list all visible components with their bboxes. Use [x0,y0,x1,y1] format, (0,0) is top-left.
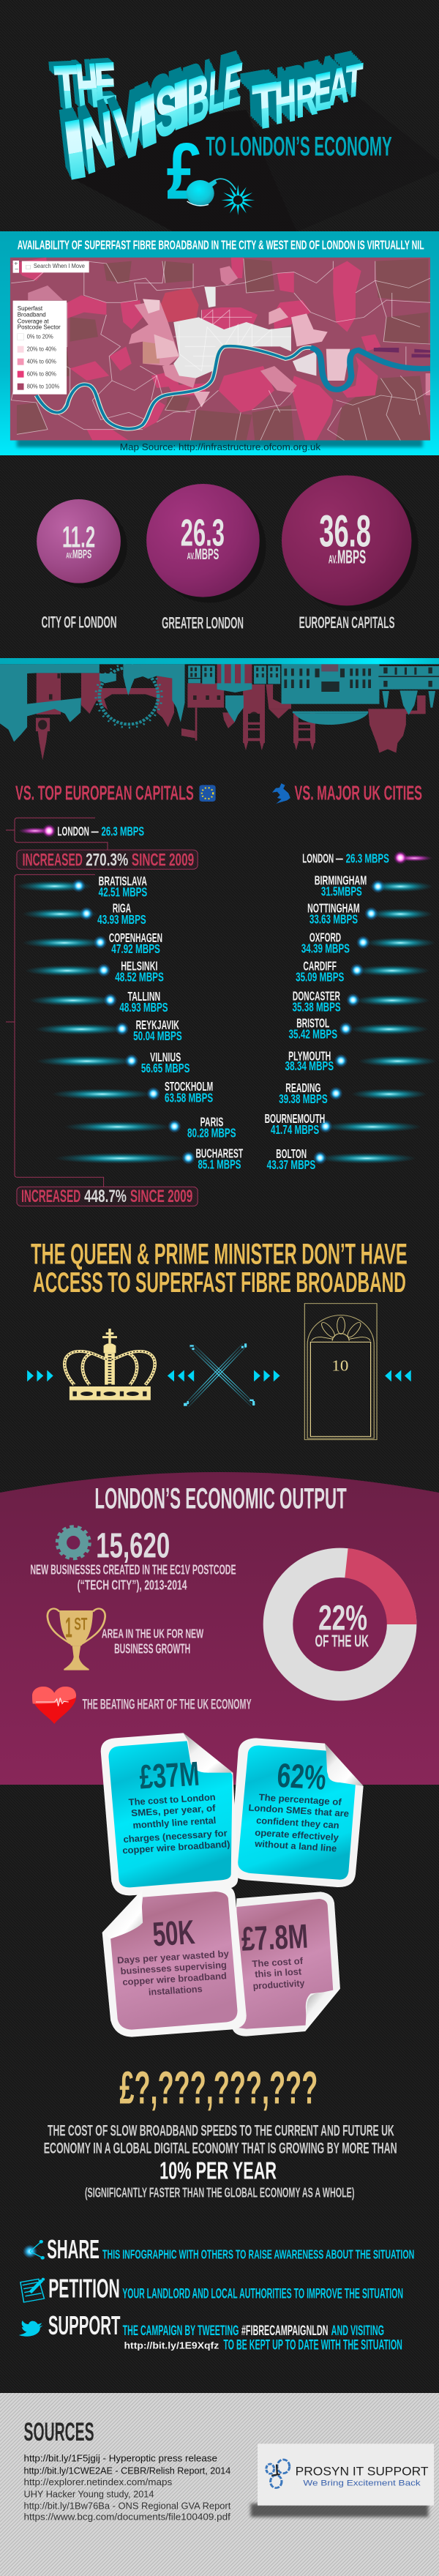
title word: THREAT [252,53,364,143]
row: Oxford: OXFORD [309,930,341,944]
sticker: £7.8M: The cost of [252,1956,304,1969]
sticker: £7.8M: productivity [252,1978,305,1991]
stickers and heart [32,1687,364,2037]
sticker: 62%: operate effectively [255,1827,339,1843]
title word: INVISIBLE [59,51,244,197]
donut chart: 22% of the UK: 22% [318,1599,367,1638]
panel content: economic output [30,1482,416,1700]
title word: THREAT: T [252,70,278,143]
map legend: 0% to 20% [27,333,53,340]
title word: INVISIBLE: S [154,70,179,153]
map legend: 40% to 60% [27,358,56,365]
sticker: £37M: The cost to London [128,1792,216,1807]
sticker: £37M: charges (necessary for [123,1828,228,1845]
source list: http://bit.ly/1CWE2AE - CEBR/Relish Report, 2014 [24,2465,230,2476]
title word: THREAT: A [329,57,349,117]
row: Birmingham: 31.5MBPS [321,884,362,898]
text: new businesses: (“TECH CITY”), 2013-2014 [78,1578,187,1593]
text: support description: http://bit.ly/1E9Xqfz [124,2340,219,2351]
sticker: £37M: £37M [138,1755,200,1796]
skyline top band [0,658,439,664]
sticker: £37M: monthly line rental [132,1815,217,1831]
logo: Prosyn IT Support [258,2444,434,2506]
callout: increased 448.7%: SINCE 2009 [130,1187,192,1206]
row: Helsinki [25,959,164,984]
row: Reading: READING [285,1080,321,1095]
cost section and call to action [44,2063,397,2200]
title word: THREAT: E [315,62,331,123]
sticker: £37M: SMEs, per year, of [131,1803,217,1818]
row: Reykjavik: REYKJAVIK [136,1018,179,1032]
circle: Greater London: 26.3 [181,511,225,553]
map legend [13,301,67,395]
actions: petition and support [19,2274,403,2353]
callout: increased 270.3% [17,850,198,870]
map legend: 80% to 100% [27,383,59,390]
London row left: LONDON — [57,824,99,839]
row: Reykjavik: 50.04 MBPS [133,1028,182,1043]
row: Helsinki: 48.52 MBPS [115,970,164,984]
circle labels [42,614,395,632]
title word: INVISIBLE: I [59,103,91,197]
text: new businesses: NEW BUSINESSES CREATED IN THE EC1V POSTCODE [30,1563,236,1578]
text: support description: THE CAMPAIGN BY TWEETING [123,2323,239,2339]
callout: increased 448.7%: 448.7% [84,1187,127,1206]
action: share [23,2235,414,2264]
row: Doncaster: DONCASTER [293,989,340,1003]
icon: UK map [272,783,290,804]
icons row: crown, cross, door [27,1304,411,1440]
row: Reading: 39.38 MBPS [279,1091,328,1106]
icon: crossed-out X [184,1343,255,1407]
donut chart: 22% of the UK [263,1548,416,1700]
map search control: + [14,260,18,266]
map legend: Postcode Sector [18,324,61,331]
actions: petition and support: SUPPORT [48,2311,121,2340]
heading: vs European capitals: VS. TOP EUROPEAN CAPITALS [15,783,194,804]
sticker: 50K: copper wire broadband [122,1971,227,1987]
map legend: 60% to 80% [27,370,56,377]
source list [24,2453,230,2523]
text: cost of slow broadband [44,2121,397,2157]
sticker: £37M [101,1733,238,1895]
row: Reykjavik [35,1018,182,1043]
title word: THE: T [53,53,81,124]
row: Bucharest [55,1146,243,1171]
sticker: £7.8M [233,1892,340,2036]
row: Bristol: 35.42 MBPS [289,1027,337,1041]
row: Nottingham: NOTTINGHAM [307,901,360,915]
panel: sources footer [0,2393,439,2576]
arrows: towards door [385,1370,411,1381]
row: Doncaster: 35.38 MBPS [292,1000,341,1014]
row: London right [302,851,432,866]
text: support description: #FIBRECAMPAIGNLDN [241,2323,328,2339]
row: Tallinn [29,989,168,1015]
row: Bratislava: BRATISLAVA [99,874,147,888]
row: Stockholm [52,1079,213,1105]
title word: THREAT: R [296,64,318,129]
row: Paris: 80.28 MBPS [187,1126,236,1140]
source list: https://www.bcg.com/documents/file100409.pdf [24,2512,230,2523]
London row left: 26.3 MBPS [102,824,144,839]
panel: London's economic output background [0,1472,439,1785]
icon: Number 10 door: 10 [331,1357,348,1374]
bracket: capitals to 448.7% [6,875,104,1187]
map search control [13,260,89,273]
row: Birmingham [315,873,432,898]
callout: increased 270.3%: INCREASED [23,851,83,870]
map search control: Search When I Move [34,263,85,269]
icon: EU flag [199,785,216,802]
row: Bolton: 43.37 MBPS [267,1157,315,1172]
circle: European capitals [282,475,419,611]
map of London broadband coverage [10,258,430,441]
arrows: towards crown [27,1370,194,1381]
title word: INVISIBLE: V [112,86,148,178]
row: Stockholm: 63.58 MBPS [165,1091,213,1105]
callout: increased 270.3%: SINCE 2009 [132,851,194,870]
row: Copenhagen: 47.92 MBPS [111,941,160,956]
sticker: 62%: 62% [276,1756,328,1797]
row: Paris [64,1115,236,1140]
icon: Number 10 door [304,1304,377,1440]
icon: petition [20,2278,45,2302]
row: Bristol: BRISTOL [296,1016,329,1030]
sticker: £7.8M: £7.8M [240,1917,309,1958]
row: Nottingham: 33.63 MBPS [309,912,358,926]
panel: map availability [0,231,439,455]
text: SOURCES [24,2417,94,2446]
icon: share [23,2240,45,2260]
London Eye [96,664,162,728]
title word: INVISIBLE: N [80,95,119,191]
comparison headings [15,783,435,1043]
comparison lower rows and heading [17,1049,437,1298]
logo: Prosyn IT Support: PROSYN IT SUPPORT [296,2465,428,2478]
circle: City of London [37,499,127,588]
row: Oxford [301,930,435,955]
title word: INVISIBLE: E [221,51,244,122]
row: Nottingham [307,901,432,926]
map legend: Coverage at [18,318,49,324]
sticker: 62% [230,1738,364,1887]
row: Bolton [267,1146,416,1172]
sticker: 62%: confident they can [256,1815,339,1831]
row: Vilnius: VILNIUS [150,1050,181,1064]
row: Vilnius [37,1050,190,1075]
source list: http://bit.ly/1F5jgij - Hyperoptic press release [24,2453,217,2464]
title word: THREAT: T [345,53,364,108]
circle: City of London: AV.MBPS [66,547,91,561]
header: title block [53,51,439,232]
source list: UHY Hacker Young study, 2014 [24,2489,154,2500]
circle labels: CITY OF LONDON [42,614,117,632]
row: Tallinn: TALLINN [127,989,160,1004]
row: Riga: RIGA [113,901,131,915]
heading: Queen and Prime Minister [31,1238,408,1298]
row: Oxford: 34.39 MBPS [301,941,350,955]
circle: Greater London [146,484,266,602]
text: support description: AND VISITING [331,2323,384,2339]
circle: Greater London: AV.MBPS [187,545,219,563]
row: Copenhagen [23,930,162,956]
icon: gear [58,1527,89,1558]
row: Doncaster [292,989,429,1014]
sticker: £7.8M: this in lost [255,1966,302,1979]
sticker: 62%: The percentage of [258,1792,342,1807]
row: Reading [279,1080,427,1106]
row: Vilnius: 56.65 MBPS [141,1061,190,1075]
sticker: 50K [102,1884,247,2037]
row: Bratislava: 42.51 MBPS [99,885,147,899]
icon: twitter bird [19,2321,43,2337]
text: first area: BUSINESS GROWTH [114,1642,190,1657]
title word: THE [53,51,118,124]
row: London right: LONDON — [302,851,343,866]
row: Cardiff [296,959,429,984]
sticker: £37M: copper wire broadband) [122,1839,230,1856]
source list: http://explorer.netindex.com/maps [24,2477,172,2488]
source list: http://bit.ly/1Bw76Ba - ONS Regional GVA Report [24,2501,230,2512]
row: London right: 26.3 MBPS [346,851,389,866]
arrows: towards cross [254,1370,280,1381]
circle: City of London: 11.2 [62,520,95,554]
row: Birmingham: BIRMINGHAM [315,873,367,887]
map search control: − [15,266,18,273]
title word: INVISIBLE: B [187,60,209,138]
sticker: 62%: without a land line [254,1838,337,1853]
action: share: SHARE [47,2235,100,2264]
row: Plymouth: 38.34 MBPS [285,1059,334,1073]
row: Bucharest: BUCHAREST [195,1146,243,1160]
row: Bratislava [17,874,147,899]
row: Tallinn: 48.93 MBPS [119,1000,168,1015]
title word: THE: E [93,51,118,116]
sticker: 62%: London SMEs that are [248,1802,350,1819]
row: Bournemouth [265,1111,421,1137]
icon: pound bomb [167,127,255,217]
circle: European capitals: 36.8 [319,506,371,556]
London row left [18,824,144,839]
speed comparison circles [0,475,439,760]
row: Bucharest: 85.1 MBPS [198,1157,241,1171]
text: first area: AREA IN THE UK FOR NEW [102,1627,204,1641]
callout: increased 448.7% [17,1187,198,1206]
title word: INVISIBLE: I [170,65,192,146]
row: Riga: 43.93 MBPS [97,912,146,927]
icon: crown [64,1329,155,1400]
row: Helsinki: HELSINKI [121,959,157,973]
icon: heart [32,1687,76,1724]
donut chart: 22% of the UK: OF THE UK [315,1632,369,1651]
icon: trophy: ST [74,1615,88,1634]
sticker: 50K: Days per year wasted by [117,1949,230,1965]
text: first area [102,1627,204,1657]
circle: European capitals: AV.MBPS [329,546,366,567]
sticker: 50K: businesses supervising [120,1960,227,1976]
skyline reflection [0,664,439,760]
sticker: 50K: installations [148,1984,203,1997]
logo: Prosyn IT Support: We Bring Excitement Back [303,2478,421,2487]
callout: increased 448.7%: INCREASED [21,1187,80,1206]
row: Paris: PARIS [200,1115,223,1129]
actions: petition and support: PETITION [48,2274,120,2304]
text: new businesses [30,1563,236,1593]
row: Stockholm: STOCKHOLM [165,1079,213,1094]
map source: Map Source: http://infrastructure.ofcom.org.uk [120,442,321,453]
row: Bournemouth: 41.74 MBPS [271,1122,319,1137]
circle labels: GREATER LONDON [162,615,244,632]
row: Plymouth [285,1049,437,1073]
map legend: Broadband [18,311,46,318]
row: Copenhagen: COPENHAGEN [109,930,162,945]
logo shadow [250,2504,428,2517]
row: Bolton: BOLTON [276,1146,307,1161]
icon: pound bomb: £ [167,127,203,217]
map shadow [17,438,423,447]
map legend: 20% to 40% [27,346,56,352]
map legend: Superfast [18,305,43,312]
title drop shadow [74,95,439,232]
icon: trophy [48,1609,105,1670]
stickers and heart: THE BEATING HEART OF THE UK ECONOMY [82,1697,252,1712]
title word: THE: H [74,52,101,121]
row: Bournemouth: BOURNEMOUTH [265,1111,325,1126]
title word: THREAT: H [274,66,297,136]
row: Plymouth: PLYMOUTH [288,1049,331,1063]
row: Cardiff: 35.09 MBPS [296,970,344,984]
bracket: London to 270.3% [6,818,108,850]
icon: trophy: 1 [65,1611,72,1643]
row: Cardiff: CARDIFF [303,959,337,973]
row: Riga [23,901,146,927]
row: Bristol [289,1016,428,1041]
sticker: 50K: 50K [151,1913,196,1954]
stat: 15,620: 15,620 [96,1526,170,1566]
title word: INVISIBLE: L [208,57,225,127]
callout: increased 270.3%: 270.3% [86,851,128,870]
stat: 10% per year: 10% PER YEAR [160,2157,277,2184]
text: support description [123,2323,402,2353]
title word: INVISIBLE: I [135,78,161,164]
